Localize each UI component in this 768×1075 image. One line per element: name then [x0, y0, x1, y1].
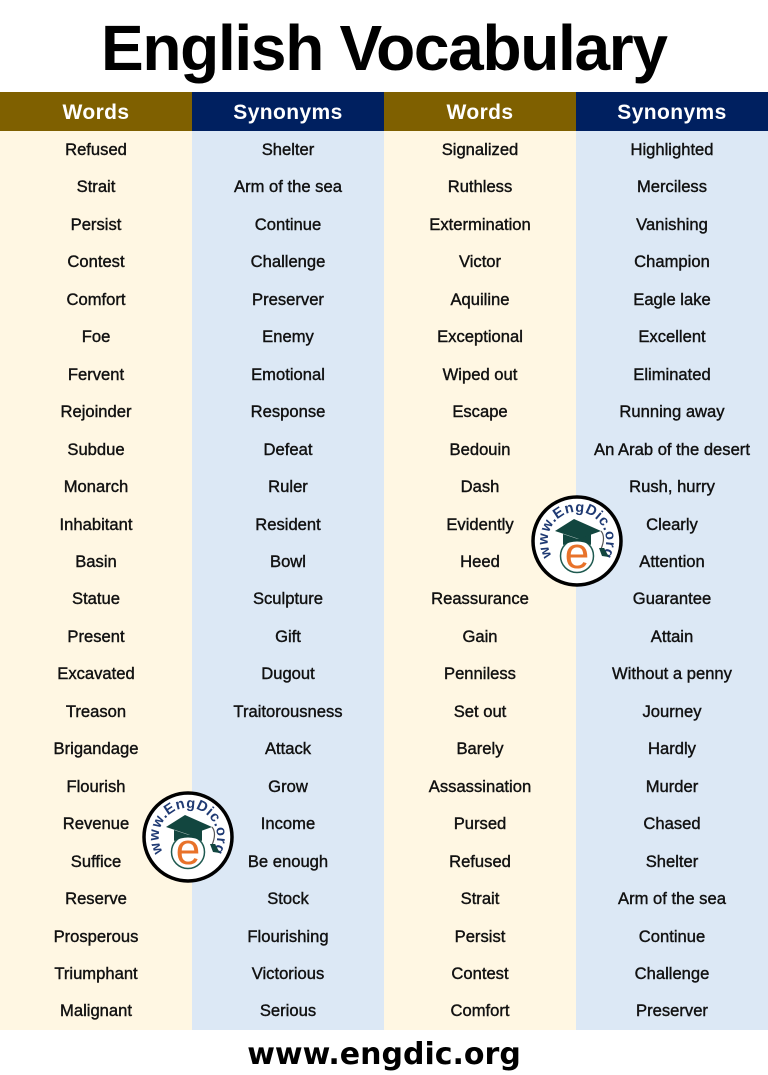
column: synonyms 1: Defeat	[264, 440, 312, 459]
header: words 2	[384, 92, 576, 131]
column: synonyms 2: Eliminated	[633, 365, 711, 384]
column: synonyms 1: Income	[261, 814, 315, 833]
column: words 2: Extermination	[429, 215, 531, 234]
column: synonyms 1: Response	[251, 402, 325, 421]
column: words 1: Persist	[71, 215, 121, 234]
column: words 2: Strait	[461, 889, 499, 908]
column: words 2: Contest	[451, 964, 509, 983]
column: words 2: Escape	[452, 402, 508, 421]
column: words 2: Persist	[455, 927, 505, 946]
column: words 2: Ruthless	[448, 177, 512, 196]
column: words 1: Treason	[66, 702, 126, 721]
column: synonyms 2: Arm of the sea	[618, 889, 726, 908]
column: synonyms 1: Bowl	[270, 552, 306, 571]
column: words 2: Signalized	[442, 140, 518, 159]
column: words 1: Contest	[67, 252, 125, 271]
column: synonyms 1: Gift	[275, 627, 301, 646]
column: synonyms 2: Excellent	[638, 327, 706, 346]
column: words 1: Foe	[82, 327, 110, 346]
title: English Vocabulary	[101, 12, 668, 84]
footer url: www.engdic.org	[247, 1037, 521, 1072]
column: synonyms 2: Continue	[639, 927, 705, 946]
column: words 1: Prosperous	[54, 927, 138, 946]
column: words 1: Suffice	[71, 852, 121, 871]
column: synonyms 1: Preserver	[252, 290, 324, 309]
column: synonyms 1: Grow	[268, 777, 308, 796]
column: words 2: Exceptional	[437, 327, 523, 346]
column: words 1: Revenue	[63, 814, 129, 833]
column: synonyms 1: Sculpture	[253, 589, 323, 608]
column: words 2: Gain	[462, 627, 498, 646]
column: synonyms 1: Traitorousness	[233, 702, 343, 721]
column: words 1: Statue	[72, 589, 120, 608]
column: synonyms 1: Emotional	[251, 365, 325, 384]
column: synonyms 2: Journey	[642, 702, 702, 721]
column: synonyms 1: Enemy	[262, 327, 314, 346]
column: synonyms 1	[192, 92, 384, 1030]
column: synonyms 1: Serious	[260, 1001, 316, 1020]
column: synonyms 2: Attain	[651, 627, 693, 646]
column: synonyms 2: Vanishing	[636, 215, 708, 234]
column: words 1: Present	[67, 627, 125, 646]
column: words 1: Subdue	[67, 440, 125, 459]
column: synonyms 1: Attack	[265, 739, 311, 758]
column: words 1: Basin	[75, 552, 117, 571]
column: synonyms 1: Victorious	[252, 964, 324, 983]
column: synonyms 1: Dugout	[261, 664, 315, 683]
column: synonyms 1: Ruler	[268, 477, 308, 496]
logo badge: lower left: www.EngDic.org	[150, 800, 225, 855]
column: words 2: Barely	[456, 739, 504, 758]
column: synonyms 1: Be enough	[248, 852, 328, 871]
column: words 2: Heed	[460, 552, 500, 571]
header: words 1: Words	[63, 101, 129, 124]
column: synonyms 2: Shelter	[646, 852, 698, 871]
column: words 2: Victor	[459, 252, 501, 271]
column: words 2: Reassurance	[431, 589, 529, 608]
logo badge: lower left: e	[176, 825, 200, 874]
logo badge: upper right	[531, 495, 623, 587]
column: words 1: Fervent	[68, 365, 124, 384]
column: synonyms 2: Champion	[634, 252, 710, 271]
column: synonyms 1: Shelter	[262, 140, 314, 159]
column: synonyms 2: Highlighted	[630, 140, 714, 159]
column: synonyms 2: Merciless	[637, 177, 707, 196]
column: words 2: Refused	[449, 852, 511, 871]
column: synonyms 2: Clearly	[646, 515, 698, 534]
column: synonyms 2: Guarantee	[633, 589, 711, 608]
column: synonyms 2: An Arab of the desert	[594, 440, 750, 459]
column: words 2: Bedouin	[450, 440, 510, 459]
column: words 1: Triumphant	[54, 964, 138, 983]
column: synonyms 2: Hardly	[648, 739, 696, 758]
column: synonyms 2: Preserver	[636, 1001, 708, 1020]
column: words 1: Comfort	[66, 290, 126, 309]
column: words 2: Penniless	[444, 664, 516, 683]
column: synonyms 1: Stock	[267, 889, 309, 908]
column: words 1: Inhabitant	[60, 515, 132, 534]
column: words 1: Excavated	[57, 664, 135, 683]
column: words 2	[384, 92, 576, 1030]
column: words 2: Dash	[461, 477, 499, 496]
column: synonyms 2	[576, 92, 768, 1030]
logo badge: upper right: www.EngDic.org	[540, 504, 614, 559]
column: words 1: Rejoinder	[60, 402, 132, 421]
column: words 1: Strait	[77, 177, 115, 196]
column: synonyms 1: Challenge	[251, 252, 325, 271]
column: synonyms 2: Murder	[646, 777, 698, 796]
column: synonyms 1: Continue	[255, 215, 321, 234]
column: words 2: Evidently	[446, 515, 514, 534]
column: synonyms 2: Challenge	[635, 964, 709, 983]
column: synonyms 2: Running away	[619, 402, 725, 421]
column: synonyms 2: Without a penny	[612, 664, 732, 683]
column: synonyms 2: Eagle lake	[633, 290, 711, 309]
logo badge: lower left	[142, 791, 234, 883]
header: synonyms 2: Synonyms	[617, 101, 727, 124]
column: synonyms 2: Attention	[639, 552, 705, 571]
column: words 2: Set out	[454, 702, 506, 721]
column: synonyms 2: Rush, hurry	[629, 477, 715, 496]
column: words 1	[0, 92, 192, 1030]
column: synonyms 1: Resident	[255, 515, 321, 534]
column: words 2: Comfort	[450, 1001, 510, 1020]
column: words 2: Wiped out	[443, 365, 517, 384]
header: words 2: Words	[447, 101, 513, 124]
column: words 1: Reserve	[65, 889, 127, 908]
column: synonyms 2: Chased	[643, 814, 701, 833]
column: words 1: Flourish	[66, 777, 126, 796]
column: words 2: Aquiline	[450, 290, 510, 309]
column: words 2: Pursed	[454, 814, 506, 833]
logo badge: upper right: e	[565, 529, 589, 578]
column: synonyms 1: Arm of the sea	[234, 177, 342, 196]
header: synonyms 2	[576, 92, 768, 131]
header: synonyms 1	[192, 92, 384, 131]
header: words 1	[0, 92, 192, 131]
column: words 2: Assassination	[429, 777, 531, 796]
column: words 1: Malignant	[60, 1001, 132, 1020]
header: synonyms 1: Synonyms	[233, 101, 343, 124]
column: words 1: Refused	[65, 140, 127, 159]
column: words 1: Monarch	[64, 477, 128, 496]
column: words 1: Brigandage	[54, 739, 138, 758]
column: synonyms 1: Flourishing	[247, 927, 329, 946]
